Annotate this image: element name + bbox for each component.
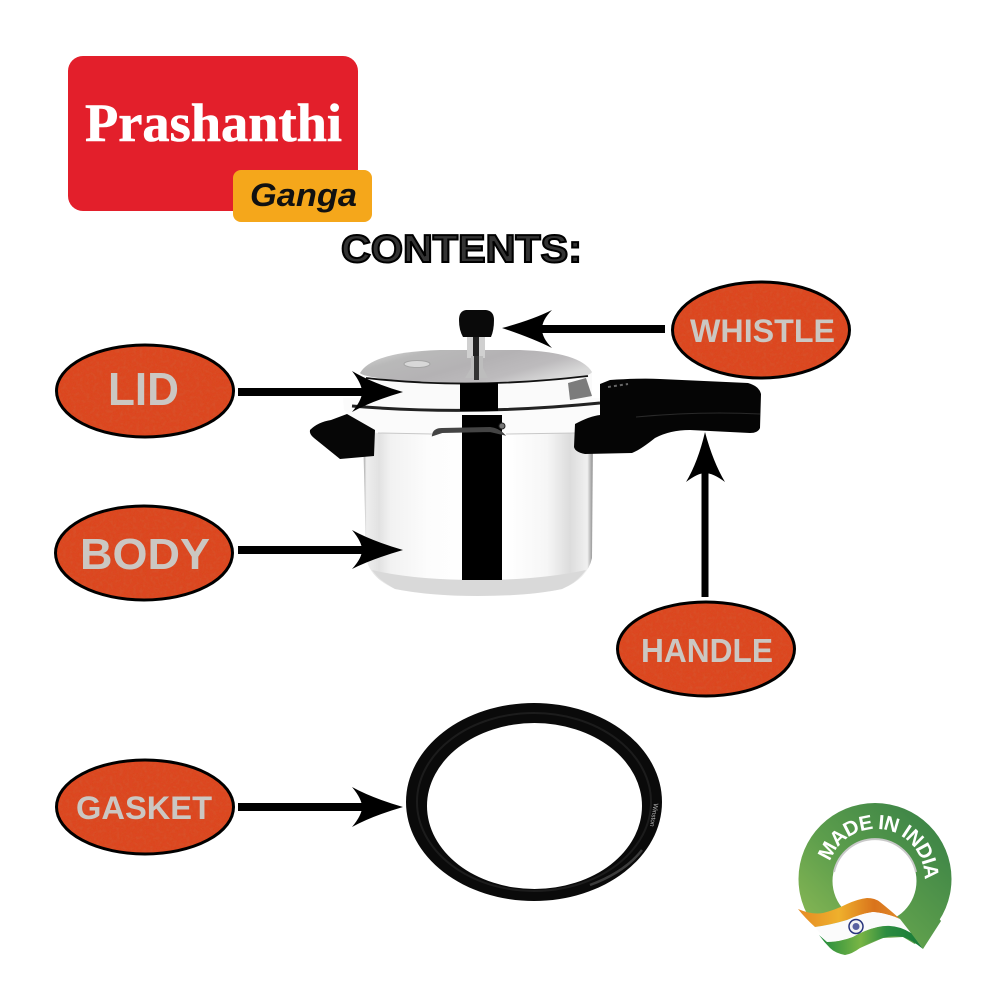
whistle oval border [672, 282, 850, 378]
handle arrow head [686, 432, 725, 482]
pressure cooker [310, 310, 761, 596]
label: gasket [56, 760, 234, 854]
cooker lock screw [499, 423, 505, 429]
lid text: LID [108, 363, 179, 415]
logo wordmark: Prashanthi [85, 93, 342, 153]
arrow: whistle [502, 310, 665, 348]
stem base [465, 356, 488, 378]
gasket text: GASKET [76, 790, 212, 826]
whistle arrow head [502, 310, 552, 348]
handle oval border [618, 602, 794, 696]
whistle oval [672, 282, 850, 378]
logo Ganga text: Ganga [250, 177, 357, 213]
gasket arrow head [352, 787, 403, 827]
badge ring [798, 803, 952, 955]
cooker lid reflection [460, 383, 498, 411]
arrow: gasket [238, 787, 403, 827]
logo red panel [68, 56, 358, 211]
body oval border [56, 506, 232, 600]
gasket arrow shaft [238, 803, 362, 811]
gasket outer [406, 703, 662, 901]
handle text: HANDLE [641, 632, 773, 669]
label: whistle [672, 282, 850, 378]
stem silver [467, 337, 485, 358]
logo: Prashanthi Ganga [68, 56, 372, 222]
cooker left side handle [310, 414, 375, 459]
cooker lid skirt [360, 372, 592, 408]
gasket highlight [590, 850, 642, 885]
chakra hub [852, 923, 860, 930]
handle grip ridges [608, 384, 628, 387]
arrow: handle [686, 432, 725, 597]
lid arrow head [352, 371, 403, 412]
stem dark core [473, 337, 479, 358]
lid arrow shaft [238, 388, 362, 396]
label: handle [618, 602, 794, 696]
gasket inner groove [417, 713, 651, 891]
lid oval border [56, 345, 234, 437]
cooker lid dome [360, 350, 592, 384]
badge: made in india [798, 803, 952, 955]
gasket ring [406, 703, 662, 901]
arrow: body [238, 530, 403, 569]
flag: green stripe [819, 926, 923, 955]
flag: saffron stripe [798, 898, 900, 927]
whistle stem [465, 337, 488, 380]
handle arrow shaft [702, 472, 708, 597]
body oval [56, 506, 232, 600]
cooker collar [343, 398, 601, 433]
cooker lid window [568, 378, 592, 400]
flag: white stripe [815, 912, 911, 942]
heading: contents: CONTENTS: [341, 228, 582, 271]
chakra outer [849, 920, 863, 934]
badge text: MADE IN INDIA [818, 814, 938, 880]
gasket oval border [56, 760, 234, 854]
lid oval [56, 345, 234, 437]
logo Ganga tag [233, 170, 372, 222]
handle oval [618, 602, 794, 696]
whistle text: WHISTLE [690, 313, 835, 349]
cooker base shading [372, 570, 586, 596]
cooker lid rivet [404, 360, 430, 368]
gasket imprint: Winston [648, 803, 659, 827]
gasket oval [56, 760, 234, 854]
whistle arrow shaft [540, 325, 665, 333]
handle seam [636, 413, 760, 417]
main handle [574, 379, 761, 454]
whistle knob [459, 310, 494, 337]
cooker rim dark line [352, 403, 600, 410]
cooker collar lower edge [378, 433, 575, 434]
cooker body reflection [462, 415, 502, 580]
body text: BODY [80, 530, 210, 579]
cooker lock bar [433, 428, 503, 435]
body arrow head [352, 530, 403, 569]
cooker body [363, 428, 593, 596]
cooker dome dark edge [366, 376, 588, 384]
badge inner bevel [834, 839, 916, 872]
body arrow shaft [238, 546, 362, 554]
label: body [56, 506, 232, 600]
label: lid [56, 345, 234, 437]
flag: ashoka chakra [849, 920, 863, 934]
badge ring lower right [902, 900, 941, 949]
stem base core [474, 356, 479, 380]
badge lower cut-out [785, 915, 960, 980]
arrow: lid [238, 371, 403, 412]
